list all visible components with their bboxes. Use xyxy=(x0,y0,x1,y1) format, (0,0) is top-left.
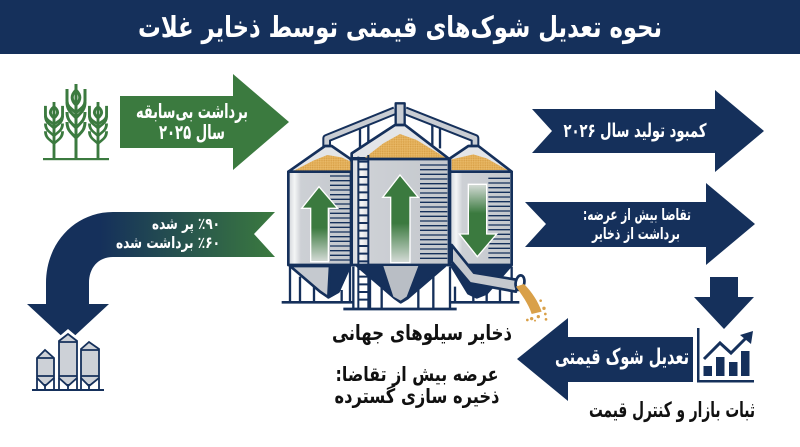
arrow text: record harvest 2025: سال ۲۰۲۵ xyxy=(159,120,225,144)
arrow text: demand over supply: برداشت از ذخایر xyxy=(591,224,680,243)
arrow: record harvest xyxy=(120,74,289,170)
caption: supply over demand xyxy=(334,362,500,408)
arrow text: demand over supply: تقاضا بیش از عرضه: xyxy=(583,205,691,224)
header banner xyxy=(0,0,800,54)
green down arrow right xyxy=(459,184,497,257)
curved arrow text xyxy=(116,214,220,252)
caption: supply over demand: ذخیره سازی گسترده xyxy=(334,384,500,408)
right silo xyxy=(450,146,512,297)
green up arrow center xyxy=(383,175,418,263)
top pipes xyxy=(327,103,475,148)
silo ribs xyxy=(330,165,510,260)
caption: supply over demand: عرضه بیش از تقاضا: xyxy=(336,362,498,386)
icon: small silos xyxy=(32,329,104,390)
arrow text: record harvest 2025 xyxy=(136,99,248,144)
discharge chute xyxy=(452,245,526,292)
curved arrow text: ۹۰‏٪ پر شده xyxy=(152,214,220,234)
central silos illustration xyxy=(282,103,547,322)
icon: wheat xyxy=(43,84,109,160)
right arrow: 2026 production shortfall xyxy=(532,90,764,172)
left silo xyxy=(288,146,351,297)
caption: global silo stocks: ذخایر سیلوهای جهانی xyxy=(332,321,512,345)
curved arrow: stocks to small silos xyxy=(27,212,275,342)
right arrow: demand over supply xyxy=(525,183,755,265)
legs and base lines xyxy=(290,267,512,309)
arrow text: record harvest 2025: برداشت بی‌سابقه xyxy=(136,99,248,123)
curved arrow text: ۶۰‏٪ برداشت شده xyxy=(116,233,220,252)
falling grain xyxy=(516,284,547,322)
title: نحوه تعدیل شوک‌های قیمتی توسط ذخایر غلات xyxy=(138,10,662,44)
ladder xyxy=(358,155,368,308)
green up arrow left xyxy=(302,187,338,262)
center silo xyxy=(352,125,449,302)
arrow text: demand over supply xyxy=(583,205,691,243)
arrow text: price shock moderation: تعدیل شوک قیمتی xyxy=(555,345,689,370)
left arrow: price shock moderation xyxy=(517,318,693,401)
arrow: down to chart xyxy=(694,277,754,329)
arrow text: shortfall: کمبود تولید سال ۲۰۲۶ xyxy=(564,120,707,142)
icon: rising bar chart xyxy=(697,328,754,382)
